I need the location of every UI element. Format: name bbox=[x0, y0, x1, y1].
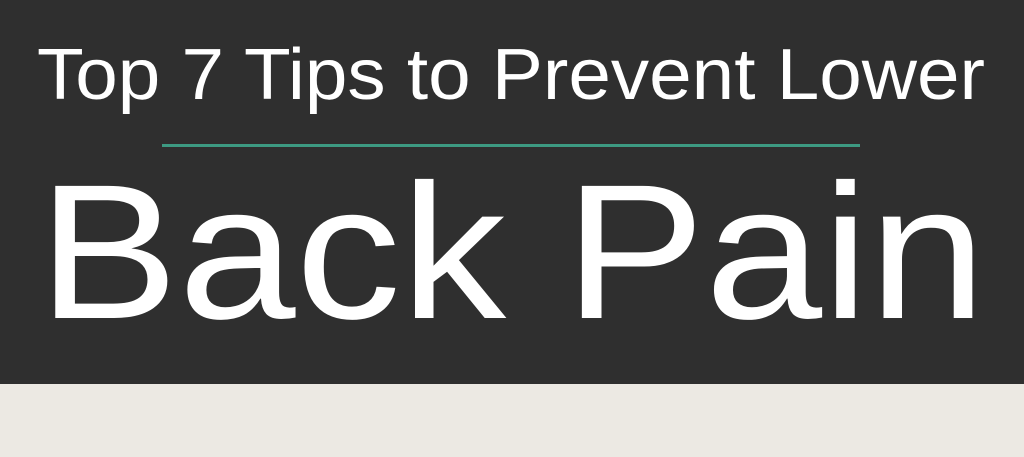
title line 1: Top 7 Tips to Prevent Lower bbox=[37, 35, 985, 115]
teal divider bbox=[162, 144, 860, 147]
bottom textured band bbox=[0, 384, 1024, 457]
title line 2: Back Pain bbox=[38, 144, 986, 359]
